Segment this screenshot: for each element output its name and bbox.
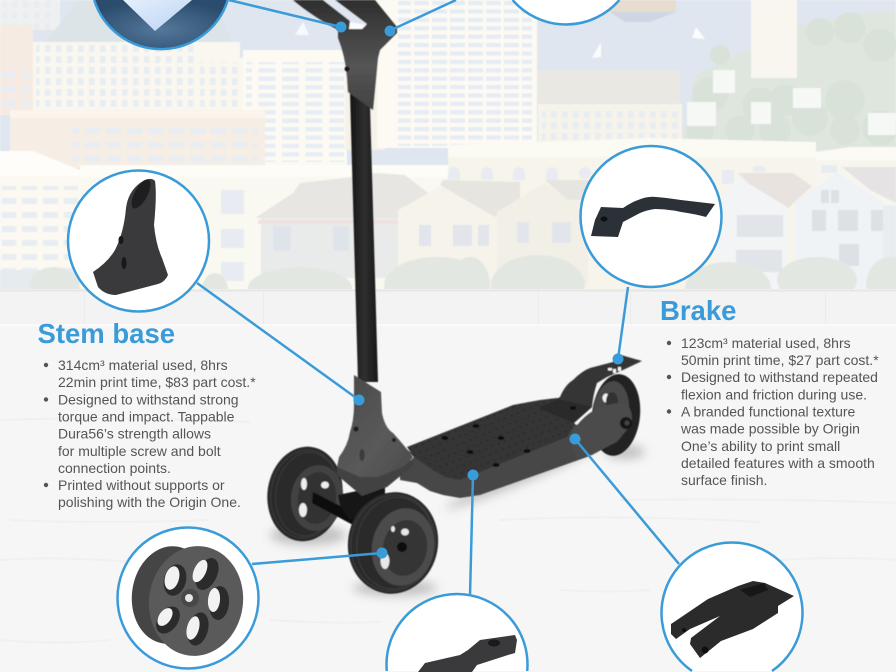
callout: deck rear part xyxy=(662,542,802,671)
text block: Brake bullets: surface finish. xyxy=(681,472,767,488)
callout: deck centre part xyxy=(386,594,528,672)
heading: Stem base: Stem base xyxy=(38,318,175,349)
text block: Brake bullets: detailed features with a smooth xyxy=(681,455,875,471)
callout: wheel part xyxy=(118,528,258,668)
text block: Stem base bullets: Printed without supports or xyxy=(58,477,225,493)
text block: Brake bullets: flexion and friction during use. xyxy=(681,386,867,402)
stem xyxy=(350,92,378,382)
callout: handle grip texture xyxy=(94,0,228,49)
background: city skyline xyxy=(0,0,896,315)
text block: Brake bullets xyxy=(667,335,879,488)
connector lines xyxy=(197,0,679,596)
ground shadow xyxy=(270,442,645,596)
text block: Stem base bullets xyxy=(44,357,256,510)
callout: brake part xyxy=(580,146,722,287)
text block: Stem base bullets: 314cm³ material used, 8hrs xyxy=(58,357,228,373)
scooter xyxy=(261,0,645,601)
handlebar head xyxy=(293,0,397,110)
callout: stem base part xyxy=(68,170,209,312)
text block: Brake bullets: One’s ability to print small xyxy=(681,438,840,454)
text block: Brake bullets: A branded functional texture xyxy=(681,404,856,420)
background: pavement xyxy=(0,289,896,672)
text block: Stem base bullets: for multiple screw and bolt xyxy=(58,443,221,459)
deck and rear fender xyxy=(400,355,642,498)
anchor dots xyxy=(336,22,624,558)
front left wheel xyxy=(261,442,349,546)
text block: Stem base bullets: Dura56’s strength allows xyxy=(58,426,211,442)
front axle xyxy=(312,485,385,525)
stem base xyxy=(337,375,415,496)
heading: Brake: Brake xyxy=(660,295,736,326)
callout: handle part xyxy=(513,0,619,24)
text block: Brake bullets: 123cm³ material used, 8hrs xyxy=(681,335,851,351)
text block: Stem base bullets: Designed to withstand strong xyxy=(58,392,239,408)
front right wheel xyxy=(340,485,446,601)
text block: Brake bullets: 50min print time, $27 part cost.* xyxy=(681,352,879,368)
text block: Stem base bullets: polishing with the Origin One. xyxy=(58,494,241,510)
text block: Stem base bullets: torque and impact. Tappable xyxy=(58,408,235,424)
text block: Stem base bullets: connection points. xyxy=(58,460,171,476)
text block: Brake bullets: Designed to withstand repeated xyxy=(681,369,878,385)
text block: Stem base bullets: 22min print time, $83 part cost.* xyxy=(58,374,256,390)
rear wheel xyxy=(588,372,644,458)
text block: Brake bullets: was made possible by Origin xyxy=(680,420,860,436)
